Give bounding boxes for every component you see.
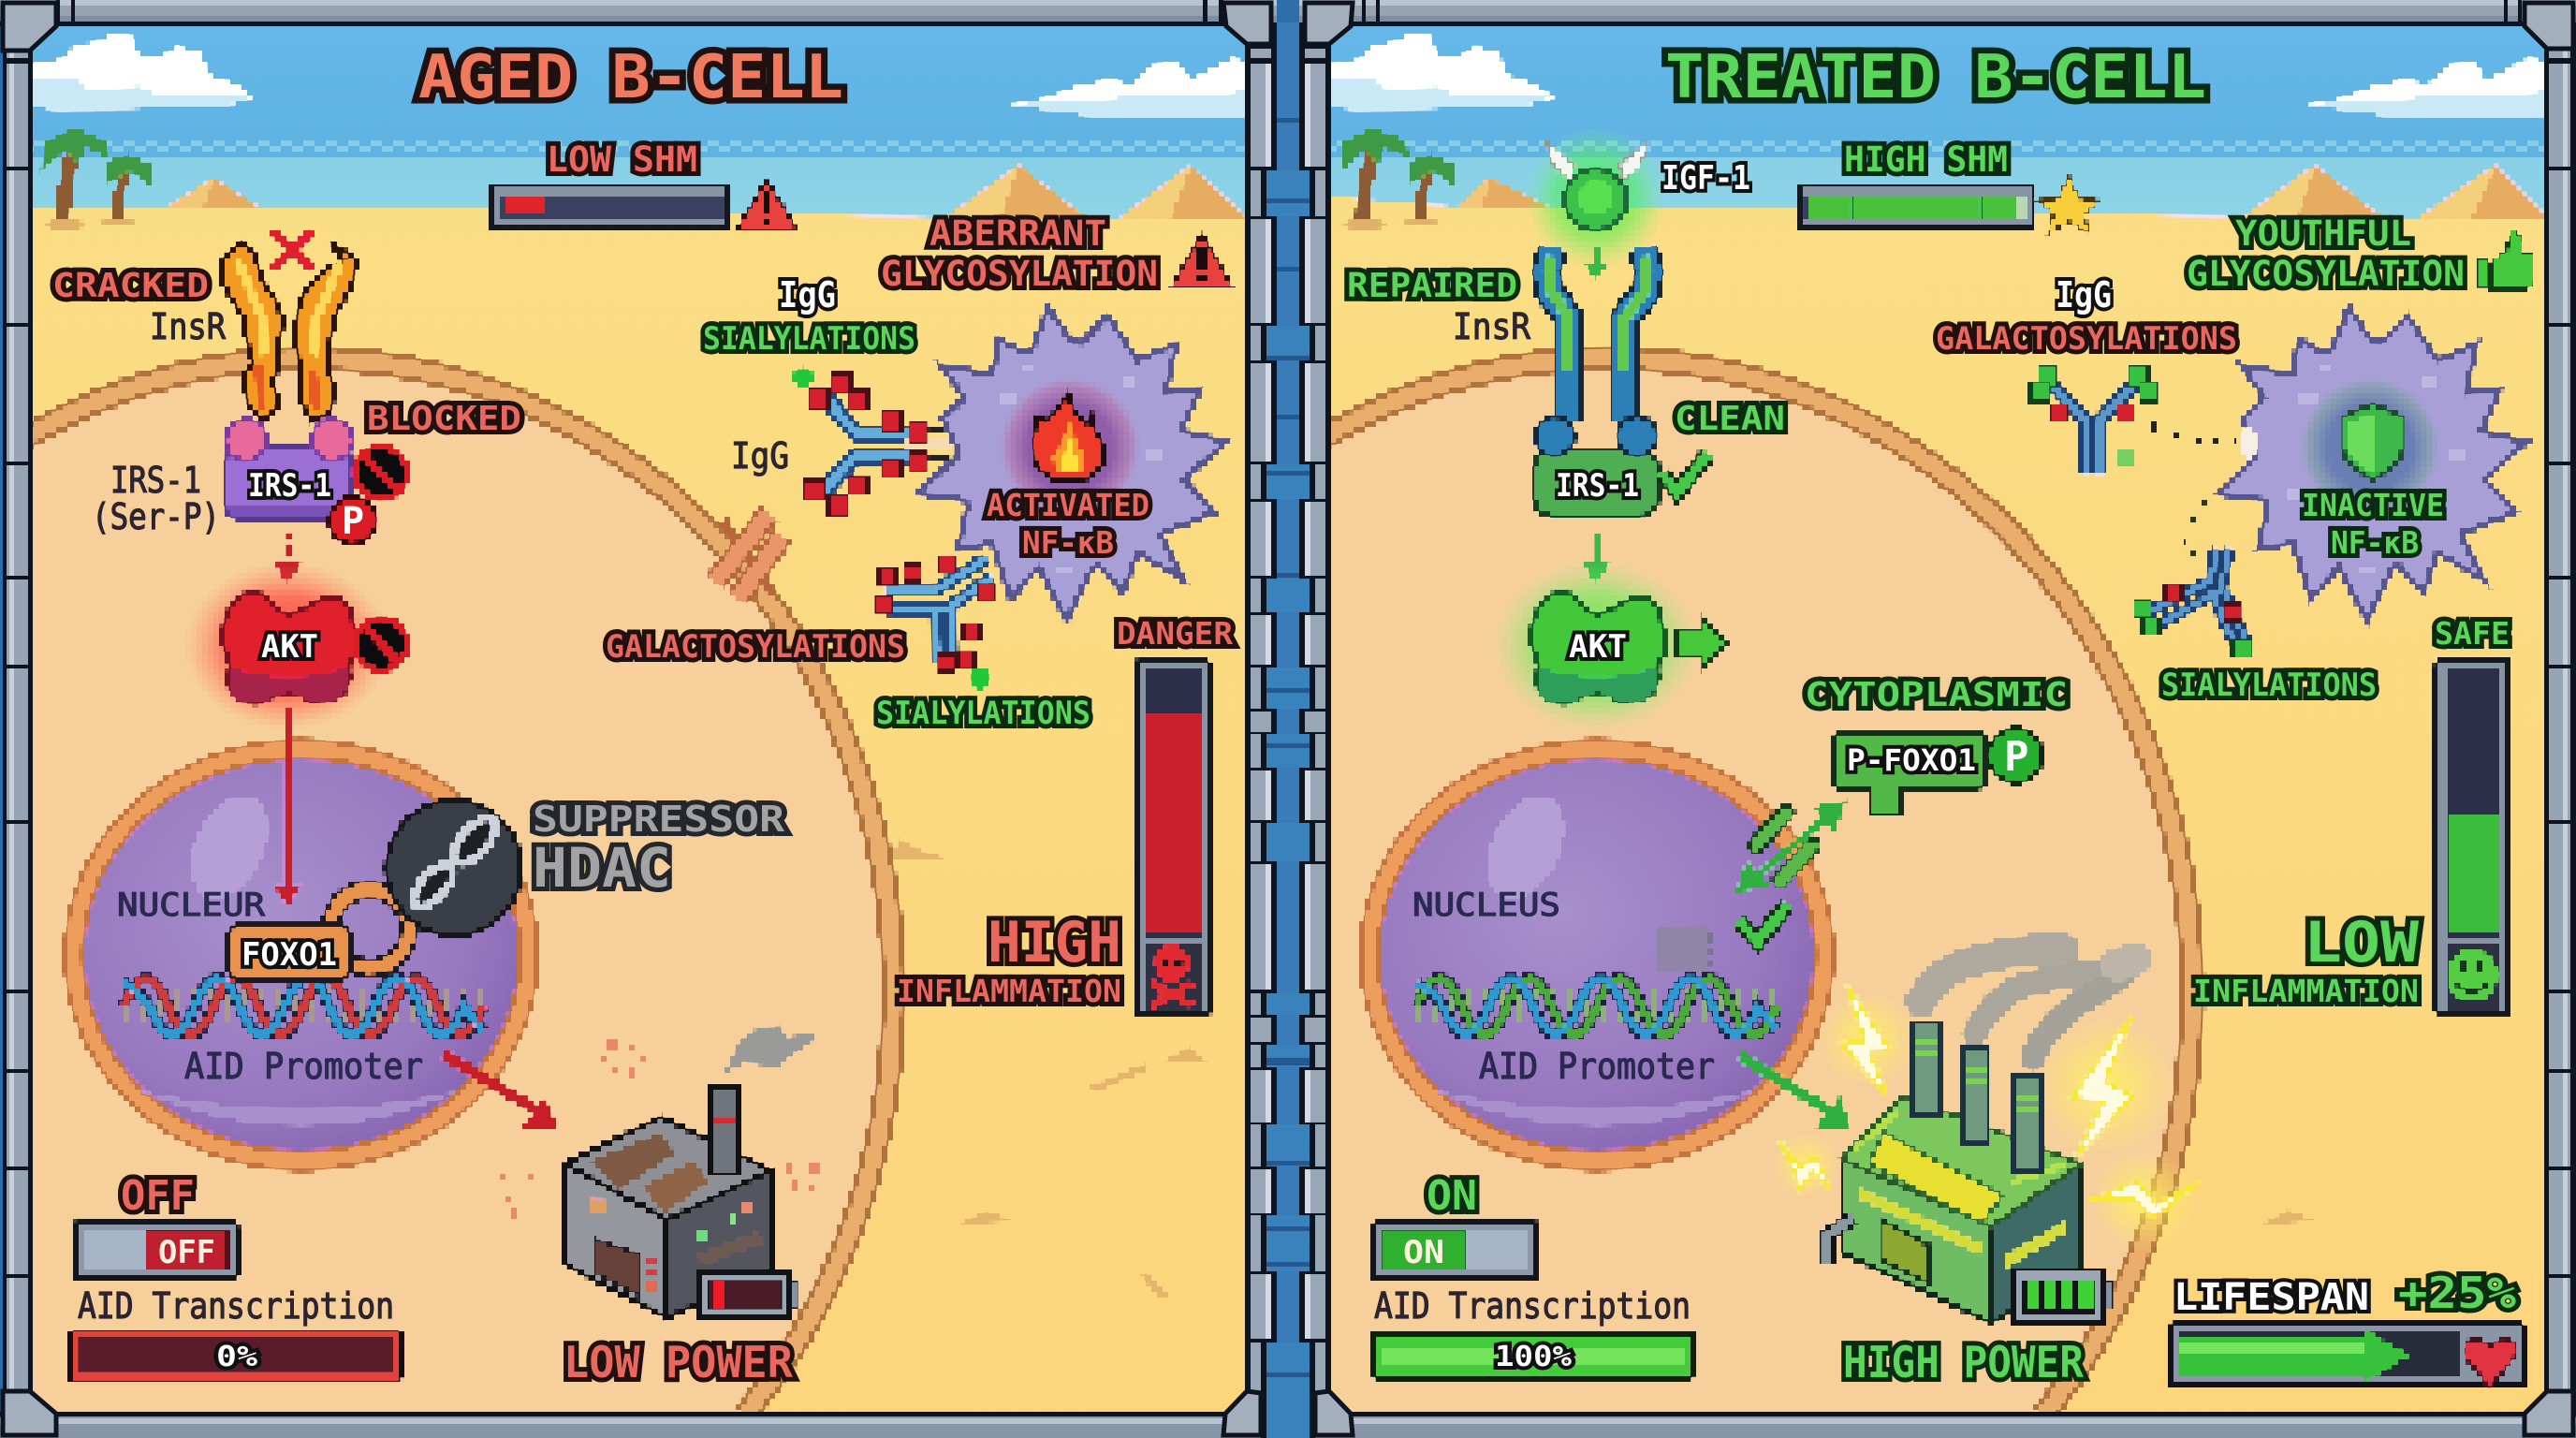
arrow AKT to nucleus bbox=[273, 709, 301, 907]
dotted link lower bbox=[2182, 498, 2207, 554]
danger: DANGER bbox=[1117, 615, 1233, 652]
shield icon bbox=[2342, 404, 2404, 479]
toggle ON bbox=[1373, 1222, 1537, 1280]
dashed arrow to AKT bbox=[273, 532, 301, 584]
sialylations lower: SIALYLATIONS bbox=[876, 695, 1090, 732]
glyco heading: YOUTHFUL bbox=[2235, 213, 2411, 254]
repaired: REPAIRED bbox=[1347, 267, 1517, 305]
sialylations top: SIALYLATIONS bbox=[703, 320, 915, 358]
IgG label top: IgG bbox=[779, 274, 836, 315]
dotted link upper bbox=[2153, 423, 2238, 446]
receptor: cracked InsR bbox=[222, 241, 356, 421]
palms bbox=[1340, 127, 1455, 229]
LOW POWER: LOW POWER bbox=[564, 1337, 793, 1387]
stop sign AKT bbox=[355, 618, 407, 670]
FOXO1: FOXO1 bbox=[242, 936, 337, 974]
nuclear pore crossed bbox=[715, 513, 783, 599]
check clean bbox=[1661, 454, 1708, 492]
AKT: AKT bbox=[1569, 628, 1627, 666]
repaired InsR bbox=[1546, 247, 1649, 421]
antibody upper bbox=[2030, 367, 2159, 475]
IRS-1 Ser-P: IRS-1 bbox=[110, 460, 201, 501]
IGF-1: IGF-1 bbox=[1661, 159, 1750, 198]
chimneys bbox=[1914, 1022, 2042, 1169]
glyco heading: ABERRANT bbox=[929, 213, 1106, 254]
IgG: IgG bbox=[2056, 274, 2112, 315]
desert sand bbox=[28, 208, 1254, 1417]
P badge bbox=[329, 497, 376, 544]
lightning bolts bbox=[1778, 985, 2200, 1217]
SHM label: LOW SHM bbox=[547, 139, 697, 180]
arrow nucleus to factory bbox=[1740, 1056, 1852, 1129]
INFLAMMATION: INFLAMMATION bbox=[897, 973, 1121, 1009]
AID Transcription: AID Transcription bbox=[78, 1285, 394, 1327]
AID Promoter: AID Promoter bbox=[1479, 1046, 1715, 1087]
text labels: aged B-cell bbox=[52, 43, 1233, 1387]
blocked: BLOCKED bbox=[367, 400, 521, 438]
IRS-1 Ser-P: (Ser-P) bbox=[92, 496, 220, 537]
toggle ON text: ON bbox=[1403, 1234, 1444, 1271]
thumb up bbox=[2479, 230, 2533, 289]
DNA helix bbox=[124, 978, 483, 1034]
inactive NF-kB: NF-κB bbox=[2331, 524, 2419, 561]
sand marks bbox=[891, 838, 1208, 1299]
0 percent: 0% bbox=[216, 1341, 257, 1373]
text labels: treated B-cell bbox=[1347, 43, 2516, 1387]
DNA helix bbox=[1417, 978, 1777, 1034]
AKT glow bbox=[1493, 560, 1699, 732]
green check nucleus bbox=[1739, 904, 1788, 942]
AKT blob bbox=[1531, 593, 1666, 703]
sky bbox=[33, 26, 1245, 219]
AID Promoter: AID Promoter bbox=[184, 1046, 423, 1087]
galactosylations: GALACTOSYLATIONS bbox=[606, 628, 905, 666]
cell interior bbox=[1320, 359, 2192, 1416]
antibody upper bbox=[793, 367, 960, 515]
smoke high bbox=[1921, 949, 2136, 1058]
antibody lower bbox=[2134, 548, 2251, 657]
InsR: InsR bbox=[150, 306, 226, 347]
P-FOXO1 block bbox=[1833, 732, 1986, 814]
dunes bbox=[1442, 165, 2555, 229]
nucleus bbox=[1369, 749, 1824, 1161]
AID progress bar 100 bbox=[1372, 1333, 1694, 1378]
glyco heading: GLYCOSYLATION bbox=[2187, 254, 2465, 294]
red X bbox=[271, 230, 314, 270]
galactosylations: GALACTOSYLATIONS bbox=[1936, 320, 2237, 358]
SHM bar low bbox=[493, 185, 728, 227]
activated NF-kB: ACTIVATED bbox=[987, 487, 1149, 523]
cell membrane bbox=[1320, 359, 2192, 1416]
small arrow to InsR bbox=[1584, 245, 1608, 281]
inflammation gauge high bbox=[1136, 660, 1209, 1016]
AKT glow bbox=[184, 562, 390, 730]
inactive NF-kB: INACTIVE bbox=[2302, 487, 2444, 523]
double arrow export bbox=[1735, 800, 1847, 893]
nucleus label: NUCLEUR bbox=[117, 887, 266, 924]
battery full bbox=[2015, 1269, 2114, 1322]
arrow to AKT bbox=[1582, 532, 1610, 584]
IRS-1 block bbox=[225, 419, 353, 519]
ghost FOXO1 slot bbox=[1657, 927, 1709, 972]
skull icon bbox=[1151, 945, 1193, 1005]
panel: aged B-cell artwork bbox=[19, 22, 1254, 1417]
AKT blob bbox=[223, 593, 358, 703]
safe: SAFE bbox=[2435, 615, 2510, 652]
suppressor HDAC: SUPPRESSOR bbox=[533, 799, 784, 840]
FOXO1 block bbox=[229, 925, 349, 979]
IGF-1 wings bbox=[1546, 142, 1647, 180]
sparks low bbox=[498, 1041, 820, 1217]
star bbox=[2038, 176, 2100, 233]
AID progress bar 0 bbox=[73, 1334, 398, 1377]
LIFESPAN: LIFESPAN bbox=[2174, 1276, 2369, 1319]
SHM bar high bbox=[1798, 185, 2033, 227]
nuclear pore open bbox=[1756, 813, 1812, 880]
cytoplasmic: CYTOPLASMIC bbox=[1805, 676, 2068, 714]
clean: CLEAN bbox=[1675, 400, 1785, 438]
arrow from AKT bbox=[1676, 618, 1728, 668]
heart bbox=[2465, 1339, 2515, 1387]
factory: high power bbox=[1827, 1095, 2081, 1323]
glyco heading bbox=[2187, 213, 2465, 294]
palms bbox=[41, 127, 152, 229]
sky bbox=[1326, 22, 2550, 243]
INFLAMMATION: INFLAMMATION bbox=[2193, 973, 2419, 1009]
IRS-1 block green bbox=[1533, 417, 1659, 517]
IGF-1 glow bbox=[1525, 127, 1667, 270]
inflammation gauge low bbox=[2437, 660, 2510, 1016]
IRS-1 Ser-P bbox=[92, 460, 220, 537]
NF-kB cell inactive bbox=[2217, 307, 2526, 621]
HDAC shackle ring bbox=[330, 889, 409, 968]
lifespan bar bbox=[2169, 1325, 2525, 1387]
ON: ON bbox=[1427, 1172, 1477, 1220]
LOW: LOW bbox=[2304, 910, 2420, 976]
title aged: AGED B-CELL bbox=[418, 43, 843, 112]
InsR: InsR bbox=[1453, 306, 1530, 347]
clouds bbox=[28, 32, 1247, 118]
suppressor HDAC bbox=[533, 799, 784, 900]
warning triangle glycosylation bbox=[1172, 232, 1232, 287]
factory: low power bbox=[564, 1088, 770, 1318]
smoke low bbox=[724, 1024, 814, 1074]
HIGH: HIGH bbox=[988, 910, 1121, 976]
desert sand bbox=[1326, 197, 2550, 1417]
NF-kB cell activated bbox=[917, 307, 1226, 621]
HIGH POWER: HIGH POWER bbox=[1843, 1337, 2084, 1387]
nucleus bbox=[74, 749, 529, 1161]
plus 25 percent: +25% bbox=[2398, 1268, 2516, 1318]
SHM label: HIGH SHM bbox=[1844, 139, 2008, 180]
glyco heading: GLYCOSYLATION bbox=[881, 254, 1158, 294]
warning triangle SHM bbox=[737, 180, 798, 229]
HDAC wrecking ball bbox=[387, 800, 521, 935]
glow bolts bbox=[1774, 990, 2195, 1252]
smiley icon bbox=[2447, 949, 2497, 1002]
toggle OFF text: OFF bbox=[158, 1234, 215, 1271]
battery empty bbox=[701, 1271, 798, 1318]
OFF: OFF bbox=[121, 1172, 195, 1220]
glyco heading bbox=[881, 213, 1158, 294]
antibody lower bbox=[874, 556, 996, 690]
P: P bbox=[2004, 733, 2029, 781]
P-FOXO1: P-FOXO1 bbox=[1847, 742, 1976, 778]
suppressor HDAC: HDAC bbox=[533, 836, 671, 900]
sialylations: SIALYLATIONS bbox=[2161, 667, 2377, 704]
P: P bbox=[342, 500, 364, 543]
cell membrane bbox=[19, 359, 894, 1416]
panel: treated B-cell artwork bbox=[1320, 22, 2555, 1417]
arrow nucleus to factory bbox=[444, 1054, 558, 1127]
activated NF-kB: NF-κB bbox=[1022, 524, 1114, 561]
sand mark bbox=[2261, 1210, 2315, 1224]
dunes bbox=[168, 163, 1245, 219]
inactive NF-kB bbox=[2302, 487, 2444, 561]
IgG 2: IgG bbox=[731, 435, 789, 477]
IGF-1 ball bbox=[1565, 169, 1627, 230]
100 percent: 100% bbox=[1495, 1341, 1572, 1373]
P badge green bbox=[1988, 728, 2042, 783]
AKT: AKT bbox=[261, 628, 318, 666]
IRS-1 chip text: IRS-1 bbox=[1556, 467, 1639, 505]
IRS-1 chip text: IRS-1 bbox=[248, 467, 331, 505]
clouds bbox=[1326, 32, 2550, 118]
nucleus label: NUCLEUS bbox=[1412, 887, 1560, 924]
cracked: CRACKED bbox=[52, 267, 209, 305]
flame icon bbox=[1032, 393, 1105, 479]
toggle OFF bbox=[75, 1222, 237, 1280]
title treated: TREATED B-CELL bbox=[1665, 43, 2206, 112]
stop sign IRS bbox=[355, 447, 407, 499]
activated NF-kB bbox=[987, 487, 1149, 561]
AID Transcription: AID Transcription bbox=[1374, 1285, 1690, 1327]
cell interior bbox=[19, 359, 894, 1416]
white impact spot bbox=[2240, 428, 2257, 458]
